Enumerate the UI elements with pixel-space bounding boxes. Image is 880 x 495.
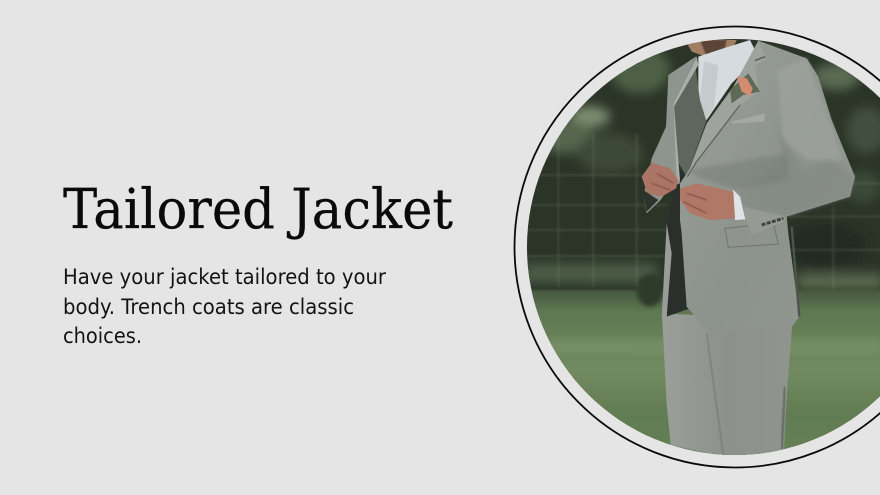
dark shirt and lining below button bbox=[666, 288, 688, 317]
lower pocket bbox=[725, 223, 778, 247]
tie bbox=[700, 62, 718, 120]
shirt bbox=[698, 40, 758, 120]
trousers bbox=[662, 313, 793, 457]
circular ring outline bbox=[514, 26, 880, 468]
hem line bbox=[792, 227, 799, 317]
hands bbox=[642, 163, 735, 220]
body text: choices. bbox=[63, 324, 142, 349]
chin and neck bbox=[688, 40, 737, 56]
body text: Have your jacket tailored to your bbox=[63, 265, 386, 290]
circular photo: man buttoning grey suit jacket bbox=[527, 39, 880, 455]
boutonniere bbox=[730, 73, 760, 103]
shirt cuff bbox=[733, 189, 745, 220]
lapel bbox=[687, 41, 766, 177]
vest bbox=[673, 63, 707, 177]
photo background: trees, grass, fence bbox=[527, 39, 880, 455]
chest pocket bbox=[732, 113, 765, 123]
title: Tailored Jacket bbox=[63, 177, 453, 241]
sleeve shading bbox=[746, 175, 856, 218]
body text bbox=[63, 265, 386, 349]
cuff bbox=[744, 207, 786, 226]
jacket left side bbox=[643, 56, 698, 318]
body text: body. Trench coats are classic bbox=[63, 295, 354, 320]
jacket right side bbox=[680, 41, 855, 333]
